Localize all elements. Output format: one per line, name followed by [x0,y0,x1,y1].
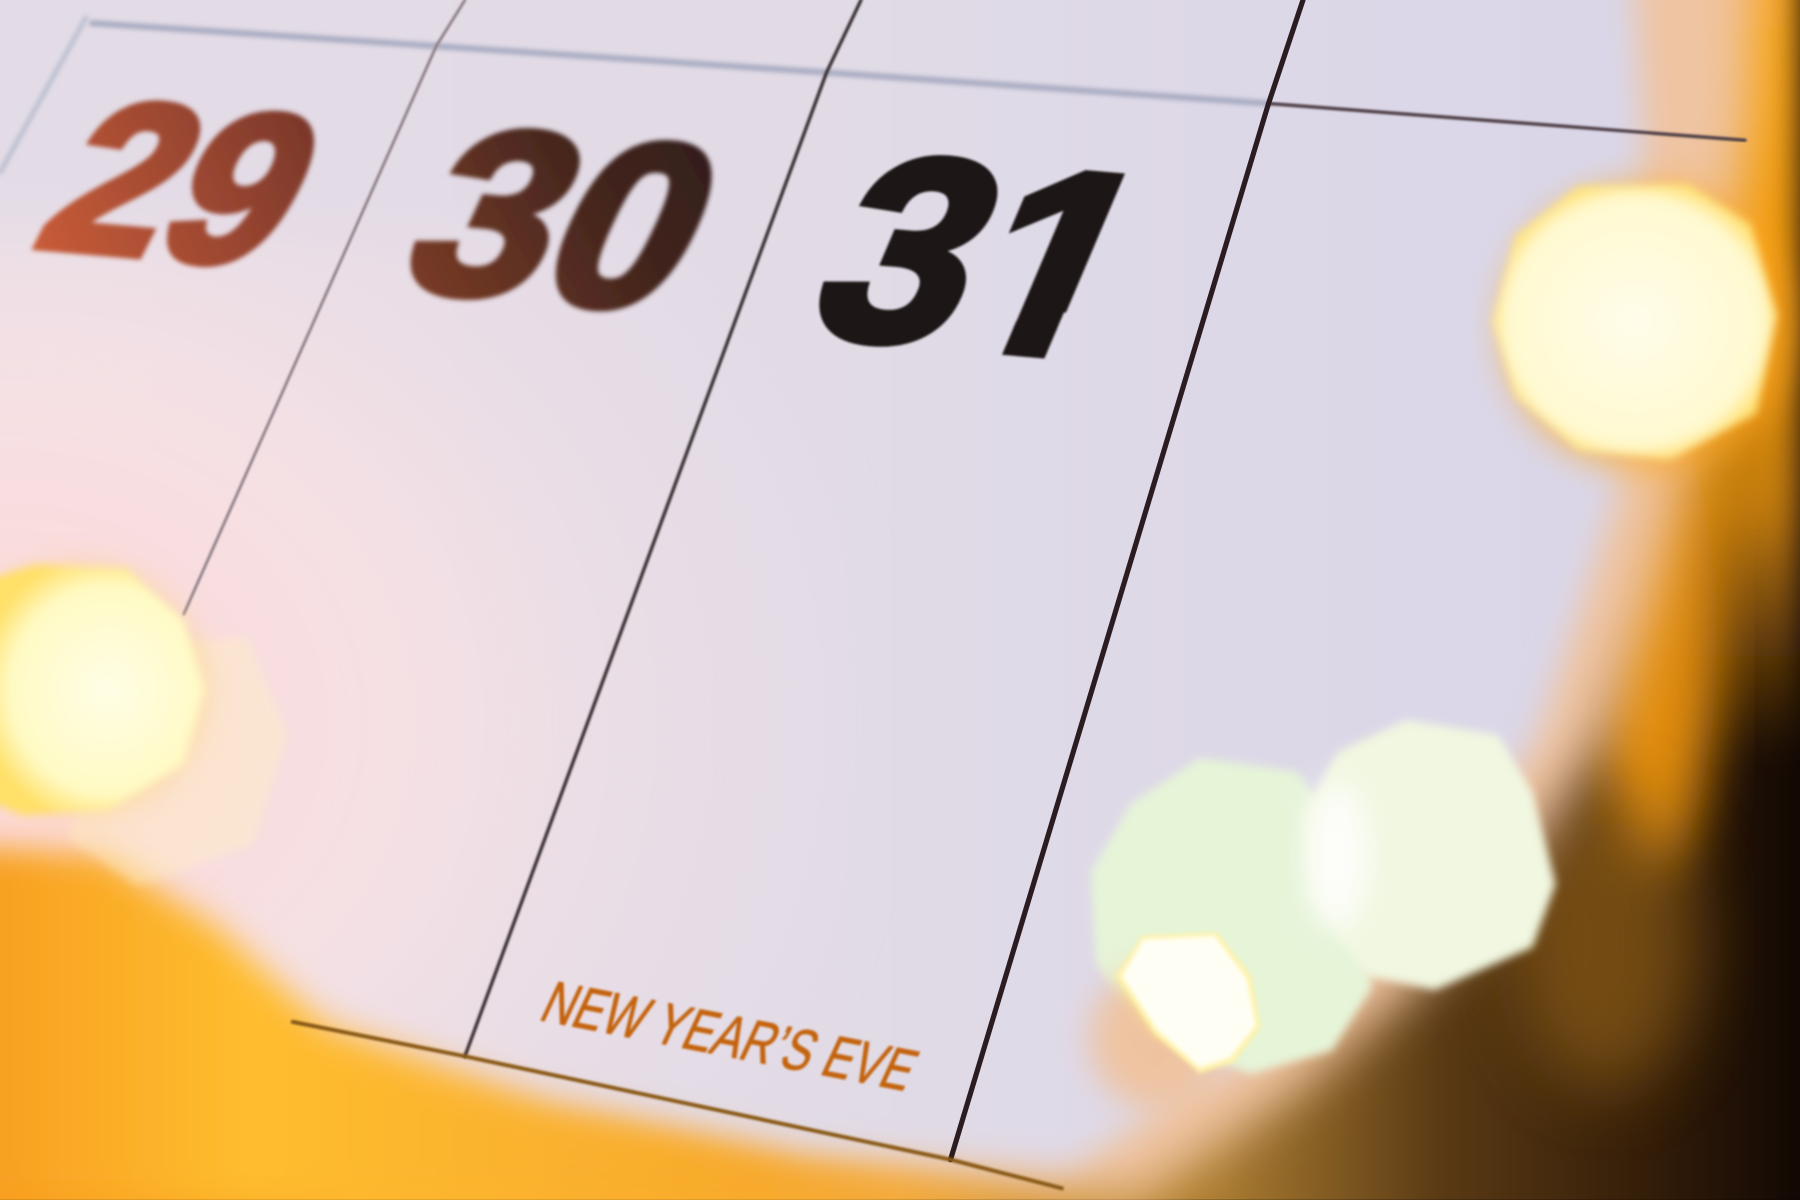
bokeh light: pale green right [1303,720,1555,990]
bokeh light: left [0,565,287,886]
date number 31: 31 [777,100,1192,413]
orange light leak over lower left [0,844,987,1200]
bokeh light: top right [1492,180,1794,474]
date number 30: 30 [370,80,761,360]
date number 29: 29 [7,57,360,312]
bokeh light: small bright [1091,932,1260,1108]
label: New Year's Eve: NEW YEAR’S EVE [532,969,928,1103]
bokeh light: pale green left [1091,758,1372,1074]
